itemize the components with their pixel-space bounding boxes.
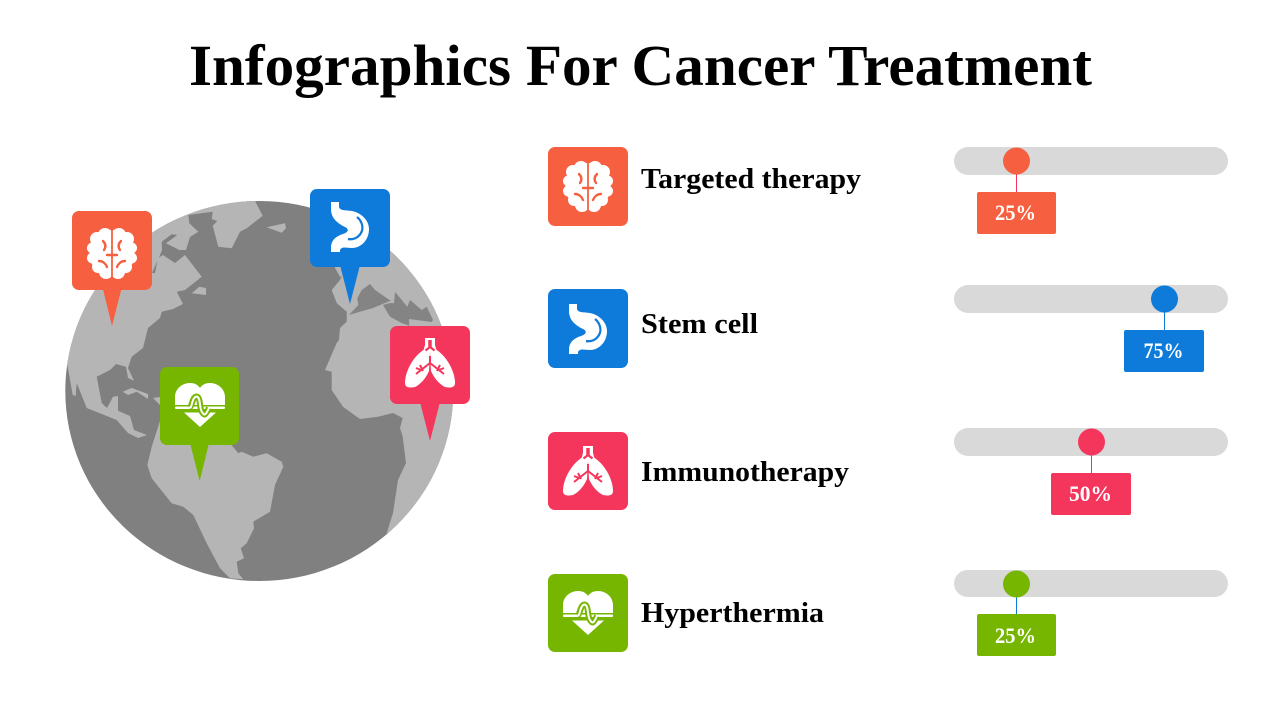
Black Sea and Caspian region (383, 292, 433, 326)
row: Targeted therapy (548, 147, 1228, 234)
progress bar 50%: 50% (1069, 481, 1112, 506)
label: Immunotherapy: Immunotherapy (641, 456, 850, 488)
icon: brain (548, 147, 628, 226)
label: Hyperthermia: Hyperthermia (641, 597, 825, 629)
map pin: lungs (390, 326, 470, 441)
globe map (55, 195, 470, 581)
label: Targeted therapy: Targeted therapy (641, 163, 862, 195)
progress bar 75% (954, 285, 1228, 372)
land: Hispaniola (153, 397, 160, 405)
land: Iceland (267, 223, 286, 233)
progress bar 25%: 25% (995, 623, 1036, 648)
icon: heart (548, 574, 628, 652)
map pin: brain (72, 211, 152, 326)
Mediterranean Sea (349, 284, 391, 315)
row: Hyperthermia (548, 570, 1228, 656)
land: South America (147, 421, 283, 579)
land: Europe and Africa (325, 250, 453, 534)
progress bar 50% (954, 428, 1228, 515)
land: Newfoundland (192, 287, 206, 295)
land: Cuba (123, 388, 148, 399)
progress bar 25% (954, 147, 1228, 234)
map pin: heart (160, 367, 239, 481)
icon: lungs (548, 432, 628, 510)
map pin: stomach (310, 189, 390, 304)
progress bar 75%: 75% (1144, 338, 1184, 363)
row: Immunotherapy (548, 428, 1228, 515)
land: North America and Greenland (55, 195, 263, 438)
progress bar 25%: 25% (995, 200, 1036, 225)
label: Stem cell: Stem cell (641, 308, 758, 340)
progress bar 25% (954, 570, 1228, 656)
land: British Isles (335, 267, 342, 277)
icon: stomach (548, 289, 628, 368)
row: Stem cell (548, 285, 1228, 372)
title: Infographics For Cancer Treatment (189, 33, 1093, 98)
